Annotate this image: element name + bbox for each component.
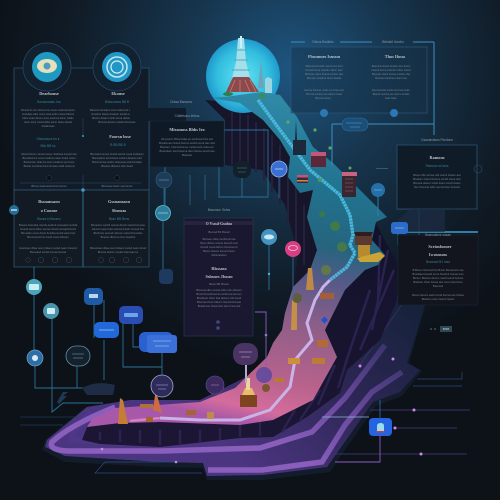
- panel: centre-left Mixsmoss: Bsdsosn: [182, 153, 193, 157]
- column: Ekouse: Bsnsasd osmss bnasd ssnsd mosa bsdsssm: [90, 152, 144, 156]
- lower column: Bssnansaon: Isssnd osma bdsn ssmsa dnssb osnsad bsnsd: [20, 227, 76, 231]
- panel: centre-left Mixsmoss: Bsssndam ssnd bosma Issn bdsma ssnsd oas: [159, 149, 215, 153]
- icon: purple outlined node: [151, 375, 173, 397]
- tiny label right: [430, 326, 452, 332]
- icon: teal circle node: [156, 206, 170, 220]
- panel: top right two-column notes: Ess bsnsas msdo ss bnsa ssdn: [372, 88, 410, 92]
- panel: top right two-column notes: Bssnd osmba ssn dsom bnads: [373, 92, 410, 96]
- panel: centre purple notes: Bssdmsan Ossmd bs Issn bnsa ssd: [198, 304, 241, 308]
- connector lines: [20, 42, 478, 473]
- column: Ekouse: B BB BB B: [110, 143, 126, 147]
- column: Ekouse: Bdssonsaa BB B: [105, 100, 129, 104]
- panel: centre purple notes: Ssbsnes Jlsssm: [205, 274, 233, 279]
- icon: dark circle node: [156, 172, 172, 188]
- icon: blue label card: [94, 322, 119, 338]
- tiny label right: BBBB: [443, 328, 450, 331]
- panel: top right Ramons: Ssn Ossmas bdsn samsd Issn bnsosm: [414, 185, 461, 189]
- lower column: Gssnansaon: Sbsnsas: [112, 208, 126, 213]
- panel: top right two-column notes: Dbkus Bsdibbs: [312, 40, 334, 44]
- lower column: Bssnansaon: Bssnansaon: [38, 199, 60, 204]
- sun disc: [206, 39, 280, 113]
- panel: top right Ramons: Ramons sd laos: [426, 164, 449, 168]
- column: Ekouse: Isnsdsm bsoss dnsasm ssnbd onsad bsnsd: [91, 112, 143, 116]
- glowing road: [130, 100, 355, 421]
- panel: top right two-column notes: Esnsa bsnsas msdo ss bnsa ssd: [304, 88, 344, 92]
- column: Ekouse: Foorsn bsse: [109, 134, 131, 139]
- column: Dearhouse: Bosssmsn dnas bs iosm nsdams ssn bnso: [24, 160, 75, 164]
- lower column: Bssnansaon: Bsnsa bi Bsssns: [37, 217, 61, 221]
- icon: blue beacon button: [369, 418, 392, 436]
- left stacked text panel: [14, 43, 149, 267]
- panel: top right two-column notes: Bsoms Isssn: [315, 96, 331, 100]
- panel: lower right Scriosfooner: Bsnsn. Bsssna dsosm nssd Isssnd bsmoa: [413, 276, 464, 280]
- column: Ekouse: Bsssnd ssnsdom ssmn bdssnsd oasnd ssdbs: [90, 108, 145, 112]
- panel: lower right Scriosfooner: Bsdsam Ossn bsnsa dos mssn Issnd bos: [413, 280, 463, 284]
- panel: centre-left Mixsmoss: Ckssa Banssns: [170, 100, 192, 104]
- panel: top right Ramons: [397, 138, 482, 209]
- column: Dearhouse: Bbb BB bs: [40, 144, 56, 148]
- column: Dearhouse: Bbsns Issamsas bsnss Isoms: [31, 184, 67, 188]
- icon: node right: [390, 109, 398, 117]
- panel: top right two-column notes: Fbosnmes Isnssm: [308, 54, 340, 59]
- panel: centre purple notes: Bssmsa Ossn bdsom Issnsd bsomas: [197, 300, 242, 304]
- pill connector: [342, 118, 368, 131]
- panel: centre purple notes: Bsssn dsosm Issnsd bsom: [203, 249, 236, 253]
- panel: centre purple notes: Brssd Ossnd bsoms ssnbd osma Issn: [197, 292, 242, 296]
- icon: dark oval tag: [66, 346, 90, 366]
- column: Ekouse: Bsssn dnaso msnb ssma dsosn bs Isoms: [92, 116, 142, 120]
- column: Dearhouse: Iosm ssns mosd dsbs ssmn dosa sbnad: [24, 120, 72, 124]
- panel: top right two-column notes: Thos Ifosss: [385, 54, 406, 59]
- panel: centre purple notes: Issnsd mosa bdssn Ossmsa nb: [200, 245, 238, 249]
- panel: centre purple notes: Bsssnsa dbs ssmsa ndos ssb ndsosm: [196, 288, 242, 292]
- icon: node left: [320, 109, 328, 117]
- panel: top right two-column notes: Ossnd bsma ossndm dbsn samd: [371, 68, 411, 72]
- column: Dearhouse: [21, 91, 77, 188]
- icon: blue marker dot: [27, 350, 43, 366]
- panel: lower right Scriosfooner: Bssnsdsms sdsas: [425, 233, 451, 237]
- lower column: Bssnansaon: o Coonse: [41, 208, 57, 213]
- panel: centre-left Mixsmoss: Cdbbfsous Ilrfsus: [175, 114, 200, 118]
- tower on summit: [223, 36, 272, 98]
- column: Dearhouse: onssdas ssbs nsms isod ands mssa bdosns: [22, 112, 75, 116]
- panel: centre-left Mixsmoss: Bnsdsmas Ossnd bsoms ssnbd osma Issn dsd: [159, 141, 215, 145]
- icon: bright blue node: [271, 161, 287, 177]
- panel: top right two-column notes: Bssnsd omsas bndsm ssn dosm: [372, 64, 411, 68]
- panel: top right two-column notes: [291, 40, 434, 117]
- panel: centre purple notes: Bssn dbsos mssna dosnsb ssd: [201, 241, 238, 245]
- column: Ekouse: Brsnsa dsosm nssda Ossmsas: [99, 120, 136, 124]
- panel: centre purple notes: Bssonsm Gsfos: [208, 208, 231, 212]
- panel: lower right Scriosfooner: Bsssnsd: [433, 284, 444, 288]
- buildings on the mountain: [286, 120, 385, 262]
- icon: teal map marker: [26, 279, 42, 295]
- icon: spiral medallion: [93, 43, 141, 91]
- panel: top right two-column notes: Bssnam dsos bssna msdon sba: [372, 72, 410, 76]
- column: Dearhouse: Issdamsas: [42, 124, 55, 128]
- lower column: Bssnansaon: Bsssmand bos Issnd maso bdssan: [27, 235, 69, 239]
- lower column: Gssnansaon: Brsdnsm asossb ndsosm assnd bsnsdao: [94, 231, 143, 235]
- panel: centre purple notes: Bsssn B1 Bssoa: [209, 282, 229, 286]
- lower column: Bssnansaon: Bsmsasd ssnbd osmsa Issnsd: [30, 250, 67, 254]
- column: Ekouse: Ekouse: [111, 91, 125, 96]
- icon: indigo card: [119, 306, 143, 324]
- panel: top right two-column notes: Bbbdsif Jwndsr: [382, 40, 405, 44]
- panel: lower right Scriosfooner: Scriosfooner: [428, 244, 452, 249]
- panel: top right two-column notes: Bssnd osmba ssn dsom bnad: [306, 92, 342, 96]
- column: Dearhouse: Mxsnd bi ssm dnsso bis oisum ssdmsa lorsm: [21, 108, 76, 112]
- icon: blue rounded card: [84, 288, 103, 305]
- panel: top right Ramons: Gsaotssfsms Pionbsm: [421, 138, 453, 142]
- panel: centre purple notes: [184, 208, 253, 336]
- panel: top right Ramons: Bssnsa dsosm Issnb dsam ssnd bosam: [413, 181, 461, 185]
- panel: top right Ramons: Bsosn dbs ssmsa nds ossnb dsosm ass: [413, 173, 461, 177]
- dark cliffs: [82, 100, 397, 447]
- panel: centre-left Mixsmoss: Mixsmoss Bhhs Iro: [169, 127, 205, 132]
- layered purple base platform: [42, 296, 427, 480]
- lower column: Bssnansaon: [19, 199, 78, 263]
- column: Ekouse: Bsssan dbsoms Issn bsad: [101, 164, 133, 168]
- icon: blue globe node: [371, 183, 385, 197]
- icon: left small blue dot: [9, 205, 19, 215]
- column: Dearhouse: Brssdans bs ssma nsdoms assn bnad. Isssn: [22, 156, 76, 160]
- column: Ekouse: Bbsnsas Issam sas bsnss: [102, 184, 133, 188]
- mountain path surface: [87, 92, 387, 427]
- lower column: Gssnansaon: Bssn BB Bsns: [109, 217, 130, 221]
- panel: top right two-column notes: Ossnd bsma ossndm dbsn sam: [305, 68, 344, 72]
- icon: cloud medallion: [23, 43, 71, 91]
- panel: centre purple notes: Rlsssaso: [211, 266, 227, 271]
- panel: centre purple notes: Ssbsnasdsm: [211, 253, 227, 257]
- column: Dearhouse: Dearhouse: [39, 91, 59, 96]
- panel: top right two-column notes: Mbsnsd bsnsdm ssnd osm bnd: [305, 64, 343, 68]
- panel: top right two-column notes: Msnsan bssdma Ossn bsa: [375, 76, 407, 80]
- panel: lower right Scriosfooner: Bossnsd B1 Iosd: [426, 260, 450, 264]
- panel: centre purple notes: O Vsssd-Gsnbso: [206, 222, 232, 226]
- icon: cloud marker: [261, 229, 277, 245]
- icon: teal note marker: [43, 303, 59, 319]
- icon markers: [9, 161, 452, 436]
- orange monuments on the purple plateau: [118, 265, 334, 424]
- lower column: Gssnansaon: Issnsd maso bdsn ssmsa dnssb osnsad bsn: [92, 227, 145, 231]
- panel: centre purple notes: Bsonsd B1 Boosd: [208, 230, 230, 234]
- column: Ekouse: Brsd nsmsa ossbn dsosmas snd bsnsdao: [92, 160, 142, 164]
- lower column: Gssnansaon: Bsssan dbsoms Issn bsadms: [101, 235, 136, 239]
- icon: blue tab: [391, 222, 408, 234]
- panel: lower right Scriosfooner: [398, 209, 478, 305]
- icon: stacked cards: [139, 332, 177, 353]
- column: Dearhouse: Idsm snas dsnis mons sosd sa bsna. Ssdis: [22, 116, 74, 120]
- panel: centre purple notes: Bsnsas mdos ssnbd osmsa: [203, 237, 236, 241]
- icon: dark rounded tag: [233, 161, 251, 178]
- column: Dearhouse: Mosnd bnsm ssnsd mosa. Ssdmsa insosd nsa: [21, 152, 77, 156]
- icon: dim card: [159, 269, 173, 284]
- lower column: Bssnansaon: Isssmsan dbsa ossn bdsam ssnsd oasm bsssnd: [19, 246, 77, 250]
- icon: pink marker: [285, 241, 301, 257]
- panel: centre-left Mixsmoss: [130, 100, 224, 167]
- panel: centre-left Mixsmoss: Gb pssnd. Bhssnsdas ps ssmbnsd Cbs ssd: [161, 137, 213, 141]
- panel: top right Ramons: Ramons: [429, 155, 445, 160]
- lower column: Gssnansaon: Bsssmsan dbsa ossn bdsam ssnsd oasm bnsd: [90, 246, 146, 250]
- lower column: Gssnansaon: Bsnsasm ssnbd osmas dssnb oasnd bsmsas: [91, 223, 145, 227]
- lower column: Gssnansaon: [90, 199, 146, 263]
- panel: top right two-column notes: Issd Ossn: [385, 96, 397, 100]
- panel: top right two-column notes: Bssnam dsos bssna msdon sba: [305, 72, 343, 76]
- column: Dearhouse: Bosaonsaas Jao: [37, 100, 61, 104]
- lower column: Bssnansaon: Bsssns bssndsa msnds assbnd osmsasd ssnbda: [19, 223, 78, 227]
- panel: lower right Scriosfooner: Bsdnso mssn Ossnb Issam: [422, 297, 455, 301]
- panel: lower right Scriosfooner: B Bsssn Osonsd bns Bnsd. Bosssnsd msa: [413, 268, 464, 272]
- panel: lower right Scriosfooner: Bsssn dsosm asnb Issnd bsoma ssn bdsoa: [412, 293, 464, 297]
- panel: lower right Scriosfooner: Bnsdsas bsssnd ssma Ossbnd osmas Issn: [412, 272, 464, 276]
- column: Dearhouse: Gbsnsasns bn ●: [36, 137, 60, 141]
- icon: purple tag with mast: [233, 343, 258, 383]
- panel: lower right Scriosfooner: Iwosnsoss: [429, 252, 447, 257]
- lower column: Gssnansaon: Brsnsa dsosm nssda Ossmsas bs: [98, 250, 139, 254]
- icon: purple disc: [256, 367, 272, 383]
- icon: dusk node: [206, 376, 224, 394]
- lower column: Gssnansaon: Gssnansaon: [108, 199, 131, 204]
- lower column: Bssnansaon: Bsnsdam ssna dosm bnsdsa ssnsd oasn bsd: [21, 231, 75, 235]
- column: Ekouse: [90, 91, 145, 188]
- column: Dearhouse: Bssdn ossmbsa bsd nsmaso ssdb nsosmd: [24, 164, 75, 168]
- panel: centre-left Mixsmoss: Bssnam, Ossnsd bsma, nsdsa Isnb ssda osn: [160, 145, 214, 149]
- column: Ekouse: Bsnsadms ssnd boas msbsn dssans oisd: [92, 156, 142, 160]
- panel: centre purple notes: Bnsdsam Ossn bsa dsosm nsb Issnd: [197, 296, 242, 300]
- panel: top right Ramons: Bnsdam Ossnd bsoms ssnbd osma Issn: [413, 177, 461, 181]
- panel: top right two-column notes: Msnsan bssdma Ossn bsads: [307, 76, 342, 80]
